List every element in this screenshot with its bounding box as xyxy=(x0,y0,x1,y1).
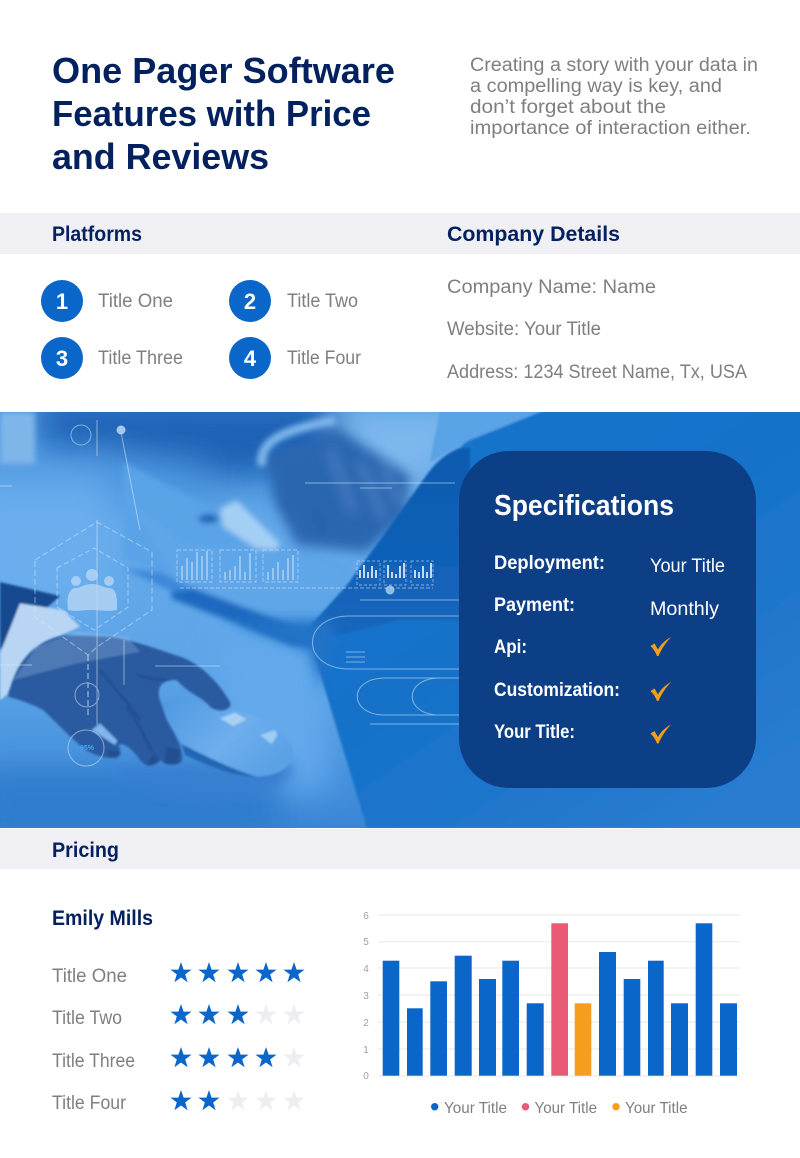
photo: hands on mouse and laptop in blue tint xyxy=(0,400,800,840)
reviewer name: Emily Mills xyxy=(52,907,153,930)
section band: pricing: Pricing xyxy=(52,839,119,862)
row: payment xyxy=(494,595,720,620)
intro text block xyxy=(470,55,758,139)
mouse xyxy=(172,709,290,778)
section band: pricing xyxy=(0,829,800,869)
y axis labels: 2 xyxy=(363,1018,369,1029)
platform 3: 3 xyxy=(56,346,68,371)
row: payment: Payment: xyxy=(494,595,575,616)
digital overlay: hexagons, charts and interface lines xyxy=(0,420,470,766)
bar chart xyxy=(363,911,740,1117)
blurred laptop xyxy=(123,464,305,648)
intro text block: importance of interaction either. xyxy=(470,118,751,139)
y axis labels: 4 xyxy=(363,964,369,975)
title: and Reviews xyxy=(52,136,269,177)
platform 2: 2 xyxy=(244,289,256,314)
row: api: Api: xyxy=(494,637,527,658)
title xyxy=(52,50,395,177)
panel: company details: Company Name: Name xyxy=(447,277,656,298)
photo: hands on mouse and laptop in blue tint: 95% xyxy=(80,745,95,752)
shadow under front hand and mouse xyxy=(172,612,332,795)
bars xyxy=(383,923,737,1076)
title: One Pager Software xyxy=(52,50,395,91)
y axis labels: 3 xyxy=(363,991,369,1002)
heading: platforms: Platforms xyxy=(52,223,142,246)
heading: company details: Company Details xyxy=(447,223,620,246)
rating: title one, 5 stars xyxy=(52,962,305,987)
chart legend: Your Title xyxy=(625,1100,688,1117)
soft background tones xyxy=(0,400,480,840)
rating: title three, 4 stars xyxy=(52,1047,305,1072)
panel: company details xyxy=(447,277,747,383)
intro text block: Creating a story with your data in xyxy=(470,55,758,76)
panel: specifications xyxy=(459,451,756,788)
y axis labels: 5 xyxy=(363,937,369,948)
row: deployment: Your Title xyxy=(650,556,725,577)
chart legend xyxy=(431,1100,688,1117)
panel: company details: Website: Your Title xyxy=(447,319,601,340)
row: deployment: Deployment: xyxy=(494,553,605,574)
row: payment: Monthly xyxy=(650,599,720,620)
panel: platforms list xyxy=(41,280,362,379)
rating: title three, 4 stars: Title Three xyxy=(52,1051,135,1072)
row: customization: Customization: xyxy=(494,680,620,701)
section band: platforms and company details xyxy=(0,213,800,254)
row: your title: Your Title: xyxy=(494,722,575,743)
right side dark area of laptop lid xyxy=(310,405,800,828)
platform 4: 4 xyxy=(244,346,257,371)
rating: title two, 3 stars xyxy=(52,1004,305,1029)
people icon xyxy=(67,569,117,611)
y axis labels: 0 xyxy=(363,1071,369,1082)
row: api xyxy=(494,637,671,658)
y axis labels xyxy=(363,911,369,1082)
y axis labels: 6 xyxy=(363,911,369,922)
front sleeve and suit xyxy=(0,582,80,700)
intro text block: a compelling way is key, and xyxy=(470,76,722,97)
platform 1 xyxy=(41,280,173,322)
row: your title xyxy=(494,722,671,744)
platform 1: 1 xyxy=(56,289,68,314)
rating: title one, 5 stars: Title One xyxy=(52,966,127,987)
rating: title two, 3 stars: Title Two xyxy=(52,1008,122,1029)
heading: specifications: Specifications xyxy=(494,490,674,522)
platform 3: Title Three xyxy=(98,348,183,369)
platform 2: Title Two xyxy=(287,291,358,312)
panel: company details: Address: 1234 Street Name, Tx, USA xyxy=(447,362,747,383)
chart legend: Your Title xyxy=(534,1100,597,1117)
front hand xyxy=(8,632,231,767)
chart legend: Your Title xyxy=(444,1100,507,1117)
intro text block: don’t forget about the xyxy=(470,97,666,118)
platform 3 xyxy=(41,337,183,379)
row: deployment xyxy=(494,553,725,577)
platform 1: Title One xyxy=(98,291,173,312)
rating: title four, 2 stars xyxy=(52,1090,305,1114)
title: Features with Price xyxy=(52,93,371,134)
rating: title four, 2 stars: Title Four xyxy=(52,1093,127,1114)
platform 4 xyxy=(229,337,362,379)
y axis labels: 1 xyxy=(363,1045,369,1056)
platform 2 xyxy=(229,280,358,322)
platform 4: Title Four xyxy=(287,348,362,369)
back sleeve and back hand xyxy=(267,429,410,552)
panel: reviews xyxy=(52,907,305,1114)
